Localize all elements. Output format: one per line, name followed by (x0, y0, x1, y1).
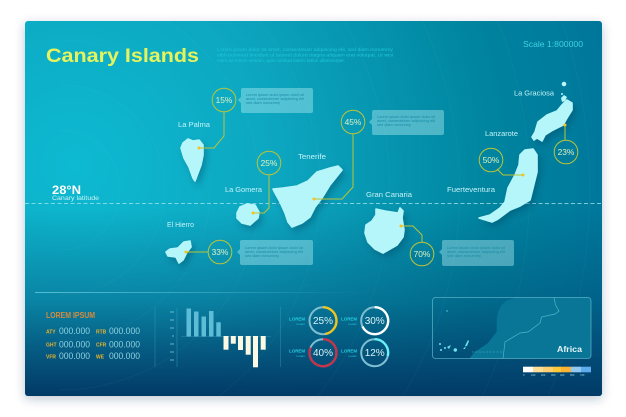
callout text: sed diam nonummy (246, 101, 280, 105)
callout text: Lorem ipsum dolor ipsum dolor sit (246, 93, 304, 97)
donut labels: LOREM (341, 316, 357, 322)
stats panel: CFR (96, 342, 107, 348)
island labels: Lanzarote (485, 129, 518, 138)
stats panel: ATY (46, 330, 56, 336)
stats panel: 000.000 (109, 340, 140, 350)
connector lines (186, 112, 565, 252)
island: Lanzarote (532, 100, 572, 141)
latitude label (52, 183, 100, 202)
percentage circles (208, 88, 578, 266)
donut labels: Lorem (296, 354, 305, 358)
callout text: sed diam nonummy (245, 254, 279, 258)
callout text: Lorem ipsum dolor ipsum dolor sit (377, 115, 435, 119)
island: Gran Canaria (365, 208, 404, 253)
donut: 12%: 12% (365, 348, 385, 359)
stats panel: WE (96, 354, 105, 360)
title: Canary Islands (46, 45, 199, 67)
inset map: Africa (432, 298, 591, 358)
donut: 30% (361, 307, 388, 334)
colour legend: 700 (580, 373, 585, 377)
donut: 25% (310, 307, 336, 334)
island: La Graciosa (561, 82, 567, 102)
island labels: Gran Canaria (366, 190, 412, 199)
connector end dots (184, 124, 566, 254)
stats panel: GHT (46, 342, 57, 348)
colour legend: 200 (541, 373, 546, 377)
stats panel: 000.000 (59, 326, 90, 336)
island labels: La Palma (178, 120, 210, 129)
callout panels (237, 88, 514, 266)
donut labels: Lorem (348, 322, 357, 326)
colour legend: 400 (560, 373, 565, 377)
callout text: amet, consectetuer adipiscing elit (245, 250, 303, 254)
colour legend: 100 (531, 373, 536, 377)
island labels: Fuerteventura (447, 185, 495, 194)
island: La Gomera (237, 204, 259, 225)
callout text: Lorem ipsum dolor ipsum dolor sit (245, 246, 303, 250)
percentage values: 23% (558, 147, 575, 157)
percentage values: 25% (261, 158, 278, 168)
stats panel: RTB (96, 330, 107, 336)
island: Tenerife (273, 166, 342, 227)
stats panel: 000.000 (109, 351, 140, 361)
inset map: Africa: Africa (557, 345, 582, 354)
scale label: Scale 1:800000 (523, 39, 583, 49)
donut: 12% (361, 339, 388, 366)
stats panel: 000.000 (109, 326, 140, 336)
bar chart (170, 308, 271, 367)
island labels: Tenerife (298, 152, 326, 161)
callout text: Lorem ipsum dolor ipsum dolor sit (447, 246, 505, 250)
intro text block: Lorem ipsum dolor sit amet, consectetuer adipiscing elit, sed diam nonummy (217, 47, 394, 52)
colour legend (523, 367, 591, 377)
stats panel: 000.000 (59, 351, 90, 361)
percentage values (212, 95, 575, 259)
intro text block: enim ad minim veniam, quis nostrud exerci tation ullamcorper. (217, 58, 345, 63)
latitude line (25, 202, 602, 204)
bottom divider (35, 291, 365, 294)
island labels: La Graciosa (514, 88, 554, 98)
donut labels: LOREM (341, 348, 357, 354)
stats panel: 000.000 (59, 340, 90, 350)
colour legend: 300 (551, 373, 556, 377)
latitude label: 28°N (52, 183, 81, 197)
callout text: sed diam nonummy (447, 254, 481, 258)
island: El Hierro (166, 241, 191, 263)
island labels (167, 88, 554, 229)
donut: 30%: 30% (365, 316, 385, 327)
callout text: sed diam nonummy (377, 123, 411, 127)
percentage values: 33% (212, 247, 229, 257)
percentage values: 50% (483, 155, 500, 165)
island: Fuerteventura (479, 149, 537, 222)
donut labels: LOREM (289, 348, 305, 354)
intro text block (217, 47, 394, 63)
callout text: amet, consectetuer adipiscing elit (246, 97, 304, 101)
percentage values: 45% (345, 117, 362, 127)
donut labels (289, 316, 357, 358)
stats panel (46, 311, 140, 361)
donut labels: Lorem (296, 322, 305, 326)
island: La Palma (181, 139, 203, 181)
donut: 40%: 40% (313, 348, 333, 359)
stats panel: LOREM IPSUM (46, 311, 95, 320)
stats panel: VFR (46, 354, 56, 360)
percentage values: 70% (414, 249, 431, 259)
latitude label: Canary latitude (52, 195, 100, 202)
percentage values: 15% (216, 95, 233, 105)
intro text block: nibh euismod tincidunt ut laoreet dolore magna aliquam erat volutpat. Ut wisi (217, 52, 393, 58)
colour legend: 500 (570, 373, 575, 377)
callout text: amet, consectetuer adipiscing elit (377, 119, 435, 123)
island labels: La Gomera (225, 185, 262, 194)
island labels: El Hierro (167, 220, 194, 229)
colour legend: 0 (523, 373, 525, 377)
section separators (155, 307, 280, 367)
donut labels: LOREM (289, 316, 305, 322)
donut: 40% (309, 339, 336, 366)
donut labels: Lorem (348, 354, 357, 358)
callout text (245, 93, 505, 258)
callout text: amet, consectetuer adipiscing elit (447, 250, 505, 254)
donut: 25%: 25% (313, 316, 333, 327)
